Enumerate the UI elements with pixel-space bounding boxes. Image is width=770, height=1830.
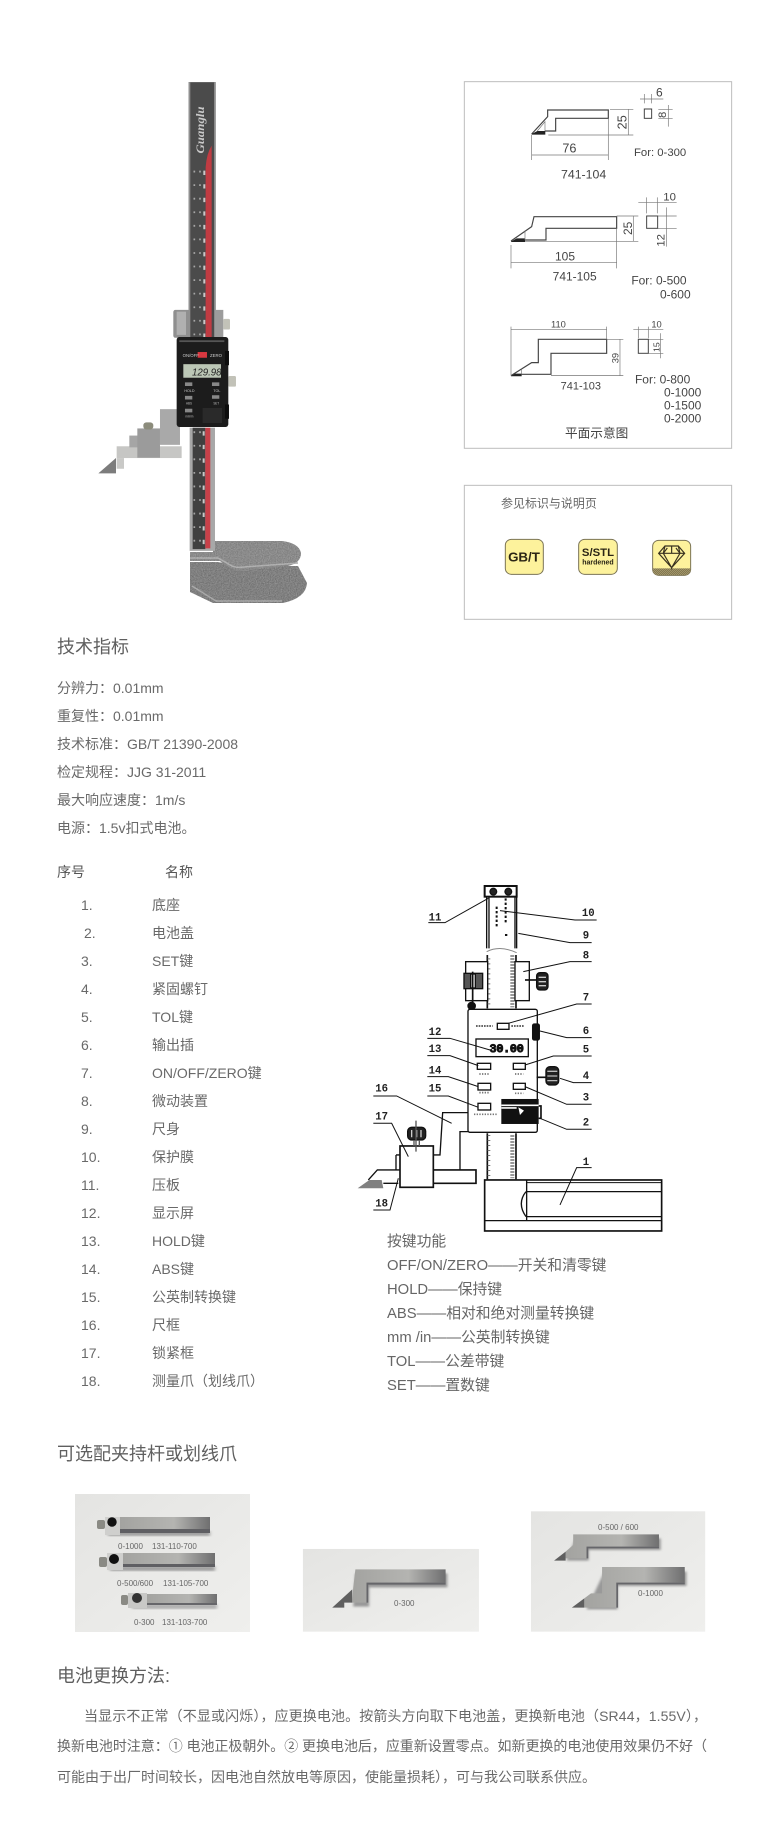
- display unit: ON/OFF: [183, 353, 199, 358]
- table: parts list: TOL键: [152, 1009, 193, 1025]
- display body: 30.00: [490, 1044, 524, 1056]
- jaw 741-104: 8: [657, 112, 669, 118]
- heading: optional holders: 可选配夹持杆或划线爪: [57, 1444, 237, 1464]
- jaw 741-105: 741-105: [553, 270, 597, 284]
- slider frame and scriber: [358, 1113, 476, 1188]
- display unit: ZERO: [210, 353, 222, 358]
- caption: 平面示意图: [565, 426, 628, 441]
- photo: scriber 0-300: [303, 1549, 479, 1632]
- table: parts list: ON/OFF/ZERO键: [152, 1065, 262, 1081]
- table: parts list: 公英制转换键: [152, 1289, 236, 1305]
- scriber clamp: [98, 409, 182, 473]
- callout numbers: 11: [429, 913, 441, 925]
- icon: S/STL hardened: S/STL: [582, 547, 614, 559]
- jaw 741-104: 25: [616, 115, 630, 129]
- icon: diamond: [653, 540, 691, 575]
- photo: digital height gauge: [98, 82, 307, 603]
- text block: technical specs: 电源：1.5v扣式电池。: [57, 820, 195, 836]
- text block: technical specs: 重复性：0.01mm: [57, 708, 164, 724]
- text block: key functions: HOLD——保持键: [387, 1281, 502, 1298]
- table: parts list: 底座: [152, 897, 180, 913]
- jaw 741-105: 12: [656, 234, 668, 247]
- jaw 741-104: 6: [656, 86, 663, 100]
- table: parts list: 锁紧框: [152, 1345, 194, 1361]
- table: parts list: 保护膜: [152, 1149, 194, 1165]
- ruler beam: [188, 82, 216, 551]
- photo: scribers 0-500/600 and 0-1000: 0-500 / 600: [598, 1523, 639, 1532]
- jaw 741-104: 76: [562, 142, 576, 156]
- text block: key functions: OFF/ON/ZERO——开关和清零键: [387, 1257, 607, 1274]
- callout numbers: 15: [429, 1084, 441, 1096]
- jaw 741-104: 741-104: [561, 167, 606, 181]
- table: parts list: 1.: [81, 897, 93, 913]
- beam scale: [487, 955, 516, 1179]
- jaw 741-105: 25: [621, 221, 635, 235]
- table: parts list: 15.: [81, 1289, 100, 1305]
- table: parts list: 紧固螺钉: [152, 981, 208, 997]
- photo: scribers 0-500/600 and 0-1000: 0-1000: [638, 1589, 663, 1598]
- icon: S/STL hardened: hardened: [582, 560, 614, 567]
- text block: technical specs: 最大响应速度：1m/s: [57, 792, 185, 808]
- text block: key functions: 按键功能: [387, 1233, 446, 1250]
- beam top: [485, 886, 517, 953]
- text block: battery replacement: 可能由于出厂时间较长，因电池自然放电等原因，使能量损耗），可与我公司联系供应。: [57, 1769, 596, 1785]
- photo: clamping rods: 0-1000: [118, 1542, 143, 1551]
- jaw 741-103: 39: [610, 353, 620, 363]
- table: parts list: 17.: [81, 1345, 100, 1361]
- text block: key functions: mm /in——公英制转换键: [387, 1328, 550, 1346]
- callout numbers: 7: [583, 993, 589, 1005]
- display unit: 129.98: [192, 367, 222, 379]
- callout numbers: 10: [582, 908, 595, 920]
- callout numbers: 9: [583, 931, 589, 943]
- jaw 741-103: 110: [551, 320, 566, 330]
- text block: key functions: ABS——相对和绝对测量转换键: [387, 1305, 594, 1322]
- photo: clamping rods: 131-105-700: [163, 1579, 209, 1588]
- callout numbers: 14: [429, 1065, 442, 1077]
- text block: technical specs: 技术标准：GB/T 21390-2008: [57, 736, 238, 752]
- base: [485, 1180, 662, 1231]
- jaw 741-105: For: 0-500: [631, 273, 687, 287]
- rod 0-1000: [97, 1517, 210, 1536]
- table: parts list: 9.: [81, 1121, 93, 1137]
- text block: technical specs: [57, 680, 238, 836]
- callout numbers: 17: [375, 1111, 388, 1123]
- display unit: mm/in: [185, 414, 194, 418]
- text block: key functions: [387, 1233, 607, 1394]
- table: parts list: 尺身: [152, 1121, 180, 1137]
- jaw 741-105: 105: [555, 250, 575, 264]
- table: parts list: 7.: [81, 1065, 93, 1081]
- callout numbers: 1: [583, 1157, 589, 1169]
- icon: S/STL hardened: [579, 539, 617, 574]
- panel: plan view of scriber jaws: [464, 82, 732, 448]
- display unit: HOLD: [184, 389, 195, 393]
- table: parts list: 尺框: [152, 1317, 180, 1333]
- table: parts list: 3.: [81, 953, 93, 969]
- panel title: 参见标识与说明页: [501, 495, 597, 510]
- table: parts list: 压板: [152, 1177, 180, 1193]
- photo: clamping rods: [75, 1494, 250, 1632]
- jaw 741-104: For: 0-300: [634, 147, 686, 159]
- table: parts list: 微动装置: [152, 1093, 208, 1109]
- callout numbers: 6: [583, 1026, 589, 1038]
- table: parts list: 2.: [84, 925, 96, 941]
- text block: technical specs: 检定规程：JJG 31-2011: [57, 764, 206, 780]
- clamp blocks: [464, 962, 548, 1010]
- table: parts list: 18.: [81, 1373, 100, 1389]
- jaw 741-105: 0-600: [660, 287, 691, 301]
- callout numbers: 13: [429, 1044, 441, 1056]
- jaw 741-103: 10: [651, 319, 662, 329]
- icon: GB/T: GB/T: [508, 549, 540, 564]
- jaw 741-103: 15: [651, 342, 661, 352]
- table: parts list: 序号: [57, 864, 85, 880]
- jaw 741-103: [511, 319, 702, 426]
- photo: clamping rods: 0-300: [134, 1618, 155, 1627]
- callout numbers: 16: [375, 1084, 388, 1096]
- table: parts list: 14.: [81, 1261, 100, 1277]
- table: parts list: 显示屏: [152, 1205, 194, 1221]
- rod 0-300: [121, 1593, 217, 1609]
- display unit: [177, 337, 229, 427]
- callout numbers: 4: [583, 1071, 590, 1083]
- text block: key functions: TOL——公差带键: [387, 1353, 504, 1370]
- icon: GB/T: [505, 539, 543, 574]
- table: parts list: HOLD键: [152, 1233, 205, 1249]
- leader lines: [373, 898, 597, 1210]
- table: parts list: SET键: [152, 953, 193, 969]
- table: parts list: 4.: [81, 981, 93, 997]
- table: parts list: 电池盖: [152, 925, 194, 941]
- text block: battery replacement: 换新电池时注意：① 电池正极朝外。② 更换电池后，应重新设置零点。如新更换的电池使用效果仍不好（: [57, 1738, 707, 1754]
- table: parts list: 11.: [81, 1177, 99, 1193]
- panel: reference symbols: [464, 485, 732, 619]
- display unit: ABS: [186, 401, 192, 406]
- photo: clamping rods: 131-103-700: [162, 1618, 208, 1627]
- callout numbers: 18: [375, 1199, 388, 1211]
- table: parts list: 名称: [165, 864, 193, 880]
- photo: clamping rods: 0-500/600: [117, 1579, 154, 1588]
- callout numbers: [375, 908, 595, 1211]
- table: parts list: 6.: [81, 1037, 93, 1053]
- jaw 741-103: 0-1500: [664, 398, 702, 412]
- photo: scribers 0-500/600 and 0-1000: [531, 1511, 705, 1632]
- jaw 741-103: 741-103: [561, 380, 601, 392]
- table: parts list: 5.: [81, 1009, 93, 1025]
- base: [190, 541, 307, 603]
- clamp blocks and knobs: [173, 310, 236, 387]
- display unit: TOL: [213, 389, 220, 393]
- text block: battery replacement: 当显示不正常（不显或闪烁），应更换电池。按箭头方向取下电池盖，更换新电池（SR44，1.55V），: [84, 1708, 707, 1724]
- jaw 741-103: 0-1000: [664, 386, 702, 400]
- table: parts list: 10.: [81, 1149, 100, 1165]
- rod 0-500/600: [99, 1553, 215, 1571]
- table: parts list: ABS键: [152, 1261, 194, 1277]
- photo: clamping rods: 131-110-700: [152, 1542, 197, 1551]
- jaw 741-103: 0-2000: [664, 412, 702, 426]
- diagram: numbered gauge line drawing: [358, 886, 662, 1231]
- display body: [468, 1009, 559, 1132]
- jaw 741-105: 10: [663, 192, 676, 204]
- photo: scriber 0-300: 0-300: [394, 1599, 415, 1608]
- jaw 741-105: [511, 192, 691, 301]
- table: parts list: 16.: [81, 1317, 100, 1333]
- callout numbers: 2: [583, 1118, 589, 1130]
- table: parts list: [57, 864, 264, 1389]
- callout numbers: 8: [583, 951, 589, 963]
- jaw 741-104: [532, 86, 686, 181]
- table: parts list: 13.: [81, 1233, 100, 1249]
- table: parts list: 测量爪（划线爪）: [152, 1373, 264, 1389]
- callout numbers: 5: [583, 1044, 589, 1056]
- text block: key functions: SET——置数键: [387, 1377, 490, 1394]
- text block: technical specs: 分辨力：0.01mm: [57, 680, 164, 696]
- jaw 741-103: For: 0-800: [635, 372, 691, 386]
- text block: battery replacement: [57, 1708, 707, 1785]
- heading: technical specs: 技术指标: [57, 637, 129, 657]
- table: parts list: 12.: [81, 1205, 100, 1221]
- callout numbers: 12: [429, 1027, 441, 1039]
- table: parts list: 8.: [81, 1093, 93, 1109]
- ruler beam: Guanglu: [193, 106, 207, 154]
- heading: battery replacement: 电池更换方法:: [57, 1666, 170, 1686]
- display unit: SET: [213, 401, 219, 406]
- callout numbers: 3: [583, 1093, 589, 1105]
- table: parts list: 输出插: [152, 1037, 194, 1053]
